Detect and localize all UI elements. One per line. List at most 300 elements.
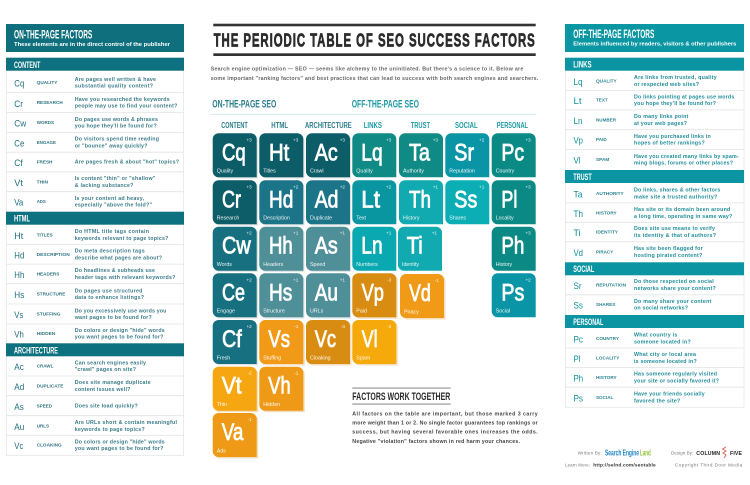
factor row: Ti: its identity & that of authors? (634, 233, 716, 239)
rows background (565, 70, 744, 407)
factor row: Lq: or respected web sites? (634, 82, 699, 88)
tile: Vc: Vc (315, 326, 336, 353)
factor row: Ac: CRAWL (37, 364, 54, 369)
factor row: Vc: Do colors or design "hide" words (75, 439, 165, 445)
factor row: Cq: Cq (14, 79, 24, 90)
tile: Hd: Description (263, 216, 290, 222)
factor row: Hh: Hh (14, 270, 24, 281)
factor row: Ce (6, 137, 184, 152)
factor row: Va: Is your content ad heavy, (75, 196, 145, 202)
panel header: Elements influenced by readers, visitors & other publishers (573, 42, 736, 48)
tile: Ce: Engage (217, 309, 235, 315)
callout body: Negative "violation" factors shown in red harm your chances. (352, 439, 521, 445)
tile: Ph: Ph (501, 233, 524, 260)
factor row: Vs: want pages to be found for? (74, 315, 152, 321)
factor row: Ac (6, 360, 184, 376)
factor row: Th: a long time, operating in same way? (634, 214, 732, 220)
factor row: Vc: CLOAKING (37, 443, 62, 448)
periodic table (213, 133, 536, 459)
factor row: Cf: Are pages fresh & about "hot" topics? (75, 160, 179, 166)
tile: Ss: +1 (479, 184, 485, 189)
factor row: Vp: Vp (574, 136, 583, 147)
tile: Lq: Quality (356, 169, 373, 175)
tile: Hd (259, 180, 304, 226)
factor row: Ce: Do visitors spend time reading (75, 137, 159, 143)
factor row: Ps: SOCIAL (596, 395, 613, 400)
factor row: Vl: Vl (574, 156, 580, 167)
tile: Hh: +1 (293, 231, 299, 236)
factor row: Ht: TITLES (37, 232, 53, 237)
factor row: Ti: Ti (574, 228, 580, 239)
tile: Ps: +2 (525, 277, 531, 282)
tile: Th: Th (409, 186, 431, 213)
factor row: Va: especially "above the fold?" (75, 202, 152, 208)
factor row: Hd: describe what pages are about? (75, 255, 162, 261)
factor row: Lt: Do links pointing at pages use words (634, 94, 734, 100)
tile: Au (306, 273, 351, 318)
section bar: architecture (6, 343, 184, 356)
factor row: Pl: LOCALITY (596, 355, 620, 360)
factor row: Vs: Vs (14, 310, 23, 321)
tile: Vh: Hidden (263, 402, 280, 408)
factor row: Lt: you hope they'll be found for? (634, 101, 716, 107)
tile: Ac: +3 (340, 137, 345, 142)
tile: Vs: Stuffing (263, 355, 281, 361)
factor row: Cr: Cr (14, 99, 24, 110)
tile: Hd: +2 (293, 184, 299, 189)
tile: Lt: +2 (386, 184, 392, 189)
tile: Vh (259, 367, 305, 412)
factor row: Cw: WORDS (37, 120, 54, 125)
factor row: Pl: Pl (574, 354, 580, 365)
footer credits: http://selnd.com/seotable (593, 462, 656, 468)
factor row: Pl (565, 352, 744, 368)
tile: Pc: +3 (525, 137, 531, 142)
factor row: Vh: you want pages to be found for? (75, 335, 163, 341)
tile: Vl (352, 320, 398, 366)
footer credits: Design By: (671, 450, 693, 455)
tile: Vl: Spam (356, 355, 371, 361)
tile: Lt: Text (356, 216, 367, 222)
factor row: Pc: someone located in? (634, 339, 691, 345)
factor row: Va (14, 196, 152, 209)
factor row: Pc: Pc (574, 334, 583, 345)
factor row: Ad: Does site manage duplicate (75, 380, 151, 386)
factor row: Vh: Do colors or design "hide" words (75, 328, 165, 334)
factor row: Cr: RESEARCH (37, 100, 63, 105)
tile: Vp: -3 (387, 277, 392, 282)
tile: As (306, 227, 351, 272)
footer credits: Written By: (578, 450, 602, 455)
tile: As: Speed (310, 262, 325, 268)
factor row: Sr: Do those respected on social (634, 279, 714, 285)
tile: Vl: Vl (362, 326, 378, 353)
tile: Ss (445, 180, 489, 224)
tile: Cr (213, 180, 258, 226)
logo: search engine land: Land (640, 447, 651, 457)
tile: Ln: +1 (386, 231, 392, 236)
tile: Ln: Numbers (356, 262, 378, 268)
factor row: Cw: Cw (14, 119, 26, 130)
section bar: links: LINKS (573, 60, 592, 70)
factor row: Ac: Ac (14, 362, 24, 373)
tile: Ad (306, 180, 351, 226)
tile: Cr: +3 (246, 184, 252, 189)
tile: Ce: Ce (222, 279, 245, 306)
factor row: Vh (14, 328, 165, 341)
factor row: Vd: hosting pirated content? (634, 253, 702, 259)
logo: search engine land: Search Engine (605, 447, 639, 457)
tile: Hh: Headers (263, 262, 284, 268)
tile: Th: +1 (433, 184, 438, 189)
tile: Ac: Crawl (310, 169, 324, 175)
factor row: Vp (565, 134, 744, 150)
factor row: Pl: is someone located in? (634, 359, 697, 365)
factor row: Vd: Vd (574, 248, 583, 259)
factor row: Vh: HIDDEN (37, 331, 56, 336)
factor row: Ta: AUTHORITY (596, 191, 625, 196)
factor row: Vl: SPAM (596, 157, 609, 162)
panel header: ON-THE-PAGE FACTORS (14, 29, 92, 41)
factor row: Au (6, 420, 184, 435)
factor row: Vt: & lacking substance? (75, 183, 133, 189)
factor row: Lq: Are links from trusted, quality (634, 75, 717, 81)
tile: Vh: -1 (294, 371, 299, 376)
callout: factors work together (352, 388, 538, 445)
tile: Vl: -2 (387, 324, 392, 329)
tile: Ph (492, 227, 536, 271)
tile: Pc: Pc (501, 139, 524, 166)
factor row: Ln (565, 114, 744, 130)
tile: Ht: Titles (263, 169, 276, 175)
factor row: Sr: REPUTATION (596, 282, 627, 287)
tile: Th (399, 180, 443, 224)
tile: Lt: Lt (361, 186, 380, 213)
tile: Ps: Ps (501, 279, 524, 306)
tile: Cf (213, 320, 258, 365)
factor row: Lt: Lt (574, 96, 582, 107)
tile: Vs: Vs (268, 326, 290, 353)
tile: Ti: Ti (407, 233, 423, 260)
factor row: Hh: Do headlines & subheads use (75, 268, 155, 274)
factor row: Th: Has site or its domain been around (634, 207, 730, 213)
factor row: Vp: hopes of better rankings? (634, 141, 705, 147)
tile: Ps (492, 273, 536, 317)
tile: Vc: -3 (341, 324, 345, 329)
tile: Cw (213, 227, 258, 272)
factor row: Ps: Ps (574, 393, 583, 404)
factor row: Cf: FRESH (37, 159, 53, 164)
factor row: Th: Th (574, 209, 583, 220)
footer credits (565, 447, 743, 468)
factor row: Ph: HISTORY (596, 375, 618, 380)
section bar: personal: PERSONAL (573, 317, 603, 327)
panel header (565, 24, 744, 52)
factor row: Cr (6, 97, 184, 113)
factor row: Vl (574, 154, 739, 167)
callout body: success, but having several favorable ones increases the odds. (352, 430, 538, 436)
tile: Vt: Thin (217, 402, 227, 408)
tile: Ac (306, 133, 351, 178)
tile: Ad: +2 (340, 184, 345, 189)
factor row: Ss: SHARES (596, 302, 615, 307)
factor row: Pc: What country is (634, 333, 677, 339)
factor row: Hs (6, 288, 184, 304)
tile: Lq: +3 (386, 137, 392, 142)
factor row: Vt (6, 176, 184, 192)
tile: Vd (400, 274, 446, 320)
tile: Cw: Cw (222, 233, 251, 260)
panel header: These elements are in the direct control of the publisher (14, 42, 170, 48)
tile: Sr: Sr (454, 139, 474, 166)
tile: Sr: +2 (479, 137, 485, 142)
tile: Ln (352, 227, 396, 271)
tile: Vc: Cloaking (310, 355, 331, 361)
factor row: Sr: networks share your content? (634, 286, 716, 292)
tile: Th: History (403, 216, 420, 222)
tile: Au: URLs (310, 309, 324, 315)
tile: Vd: Piracy (404, 309, 419, 315)
factor row: Hh: HEADERS (37, 271, 59, 276)
factor row: Ta (565, 188, 744, 203)
factor row: Vc (14, 439, 165, 452)
factor row: Cq: QUALITY (37, 80, 58, 85)
tile: Cq (213, 133, 258, 178)
factor row: Vs: STUFFING (37, 312, 61, 317)
callout heading: FACTORS WORK TOGETHER (352, 391, 450, 403)
factor row: Ad: content issues well? (75, 387, 130, 393)
factor row: Ph: Ph (574, 373, 583, 384)
factor row: Ss: Ss (574, 301, 583, 312)
factor row: Pc (565, 333, 744, 348)
tile: Hs: +1 (293, 277, 299, 282)
section bar: personal (565, 315, 744, 328)
tile: Pl: Pl (501, 186, 517, 213)
factor row: Vs (6, 308, 184, 324)
tile: Vs (259, 320, 305, 366)
tile: Lq: Lq (361, 139, 383, 166)
factor row: Cq: Are pages well written & have (75, 77, 156, 83)
tile: Hs: Structure (263, 309, 285, 315)
factor row: Hd: Hd (14, 251, 24, 262)
tile: Pl: +3 (525, 184, 531, 189)
tile: Ta: Ta (409, 139, 431, 166)
factor row: Ss: on social networks? (634, 306, 688, 312)
tile: Hd: Hd (269, 186, 293, 213)
tile: Pc: Country (496, 169, 515, 175)
tile: Va: Va (222, 419, 244, 446)
tile: Hh: Hh (269, 233, 293, 260)
tile: Lt (352, 180, 396, 224)
tile: Ad: Ad (315, 186, 338, 213)
column headings (221, 121, 528, 130)
panel header (6, 24, 184, 52)
factor row: Vh: Vh (14, 330, 24, 341)
tile: Hs (259, 273, 304, 318)
factor row: Ht: Ht (14, 231, 24, 242)
tile: Ps: Social (496, 309, 510, 315)
tile: Au: +1 (340, 277, 345, 282)
factor row: Ln: Ln (574, 116, 582, 127)
factor row: Hd: DESCRIPTION (37, 252, 70, 257)
tile: Ac: Ac (315, 139, 338, 166)
tile: Ti: Identity (402, 262, 419, 268)
footer credits: Learn More: (565, 462, 590, 467)
factor row: Sr: Sr (574, 281, 582, 292)
factor row: Vd: Has site been flagged for (634, 246, 703, 252)
logo: column five: FIVE (730, 451, 743, 457)
factor row: Ce: Ce (14, 138, 24, 149)
factor row: Th: HISTORY (596, 210, 618, 215)
tile: Ss: Ss (454, 186, 477, 213)
factor row: Vd (574, 246, 703, 259)
column headings: CONTENT (221, 121, 248, 130)
factor row: Vl: ming blogs, forums or other places? (634, 161, 733, 167)
factor row: Va: ADS (37, 199, 46, 204)
tile: Cf: +2 (246, 324, 252, 329)
section heading: on-the-page seo: ON-THE-PAGE SEO (212, 99, 277, 111)
tile: Vt: -2 (248, 371, 252, 376)
factor row: Ti (565, 226, 744, 242)
tile: Vc (306, 320, 352, 366)
tile: Ta: Authority (403, 169, 424, 175)
section bar: architecture: ARCHITECTURE (14, 345, 58, 355)
tile: Vt: Vt (222, 373, 242, 400)
factor row: Vt: Is content "thin" or "shallow" (75, 176, 156, 182)
tile: Ta (399, 133, 443, 177)
factor row: Sr (565, 279, 744, 295)
tile: Cw: Words (217, 262, 232, 268)
factor row: As: Does site load quickly? (75, 404, 138, 410)
tile: As: +1 (340, 231, 345, 236)
factor row: Cr: people may use to find your content? (75, 104, 177, 110)
factor row: Va: Va (14, 198, 24, 209)
tile: As: As (315, 233, 338, 260)
factor row: Vc: Vc (14, 441, 23, 452)
intro text: some important "ranking factors" and best practices that can lead to success with both search engines and searchers. (211, 76, 539, 82)
tile: Ph: +3 (525, 231, 531, 236)
factor row: Ss (574, 299, 712, 312)
intro text: Search engine optimization — SEO — seems like alchemy to the uninitiated. But there's a science to it. Below are (211, 67, 523, 73)
logo: column five: COLUMN (696, 451, 720, 457)
factor row: Hd: Do meta description tags (75, 249, 145, 255)
factor row: Ti: Does site use means to verify (634, 226, 715, 232)
factor row: Vp: PAID (596, 137, 607, 142)
factor row: Ti: IDENTITY (596, 229, 619, 234)
factor row: Lt (565, 94, 744, 110)
factor row: Pc: COUNTRY (596, 336, 620, 341)
section bar: content (6, 58, 184, 71)
tile: Vh: Vh (268, 373, 291, 400)
factor row: Ln: Do many links point (634, 114, 689, 120)
factor row: Lq: QUALITY (596, 78, 618, 83)
factor row: Ph: your site or socially favored it? (634, 378, 719, 384)
tile: Cf: Cf (222, 326, 242, 353)
factor row: Au: keywords to page topics? (75, 427, 145, 433)
factor row: Ac: "crawl" pages on site? (75, 367, 136, 373)
factor row: Au: URLS (37, 423, 49, 428)
factor row: Vp: Have you purchased links in (634, 134, 711, 140)
factor row: Vt: THIN (37, 179, 49, 184)
factor row: Ac: Can search engines easily (75, 360, 146, 366)
factor row: Ph (565, 372, 744, 387)
tile: Cq: Quality (217, 169, 234, 175)
tile: Hs: Hs (269, 279, 292, 306)
tile: Lq (352, 133, 396, 177)
tile: Vd: -1 (435, 278, 439, 283)
tile: Ph: History (496, 262, 513, 268)
factor row: Cf (6, 158, 184, 172)
logo: column five (696, 447, 743, 458)
column headings: PERSONAL (497, 121, 528, 130)
factor row: Ln: NUMBER (596, 117, 617, 122)
factor row: Cq (6, 77, 184, 92)
tile: Cr: Research (217, 216, 239, 222)
factor row: Ce: ENGAGE (37, 140, 56, 145)
factor row: Hh: header tags with relevant keywords? (75, 275, 175, 281)
tile: Vt (213, 367, 258, 412)
section bar: html: HTML (14, 214, 30, 224)
column headings: HTML (271, 121, 288, 130)
factor row: Ad: DUPLICATE (37, 383, 63, 388)
tile: Ht: Ht (269, 139, 290, 166)
section bar: social (565, 262, 744, 275)
factor row: Ph: Has someone regularly visited (634, 372, 717, 378)
factor row: Pl: What city or local area (634, 352, 696, 358)
factor row: As: SPEED (37, 403, 53, 408)
factor row: Ln: at your web pages? (634, 121, 687, 127)
section heading: off-the-page seo: OFF-THE-PAGE SEO (352, 99, 419, 111)
column headings: SOCIAL (455, 121, 478, 130)
factor row: Cw: you hope they'll be found for? (75, 124, 157, 130)
factor row: As: As (14, 402, 24, 413)
tile: Cw: +2 (246, 231, 252, 236)
factor row: As (6, 402, 184, 416)
footer credits: Copyright Third Door Media (675, 462, 743, 467)
tile: Ln: Ln (361, 233, 383, 260)
factor row: Ps (574, 392, 705, 404)
factor row: Hs: data to enhance listings? (75, 295, 144, 301)
section bar: trust: TRUST (573, 172, 592, 182)
tile: Ad: Duplicate (310, 216, 332, 222)
tile: Cf: Fresh (217, 355, 230, 361)
tile: Sr (445, 133, 489, 177)
tile: Pl: Locality (496, 216, 514, 222)
section bar: trust (565, 170, 744, 183)
column headings: TRUST (411, 121, 430, 130)
factor row: Ta: Do links, shares & other factors (634, 188, 720, 194)
factor row: Hh (6, 268, 184, 284)
factor row: Ht: Do HTML title tags contain (75, 229, 149, 235)
factor row: Lt: TEXT (596, 98, 608, 103)
factor row: Ta: Ta (574, 189, 583, 200)
factor row: Ss: Do many share your content (634, 299, 712, 305)
section bar: social: SOCIAL (573, 264, 594, 274)
factor row: Ad (6, 380, 184, 396)
factor row: Au: Au (14, 422, 24, 433)
factor row: Ad: Ad (14, 382, 24, 393)
factor row: Vl: Have you created many links by spam- (634, 154, 739, 160)
callout body (352, 411, 538, 445)
factor row: Vd: PIRACY (596, 249, 614, 254)
title: THE PERIODIC TABLE OF SEO SUCCESS FACTORS (214, 31, 535, 51)
tile: Vp: Vp (362, 279, 384, 306)
factor row: Th (565, 207, 744, 222)
tile: Au: Au (315, 279, 338, 306)
factor row: Cf: Cf (14, 158, 23, 169)
factor row: Cr: Have you researched the keywords (75, 97, 170, 103)
tile: Ti (398, 227, 442, 271)
